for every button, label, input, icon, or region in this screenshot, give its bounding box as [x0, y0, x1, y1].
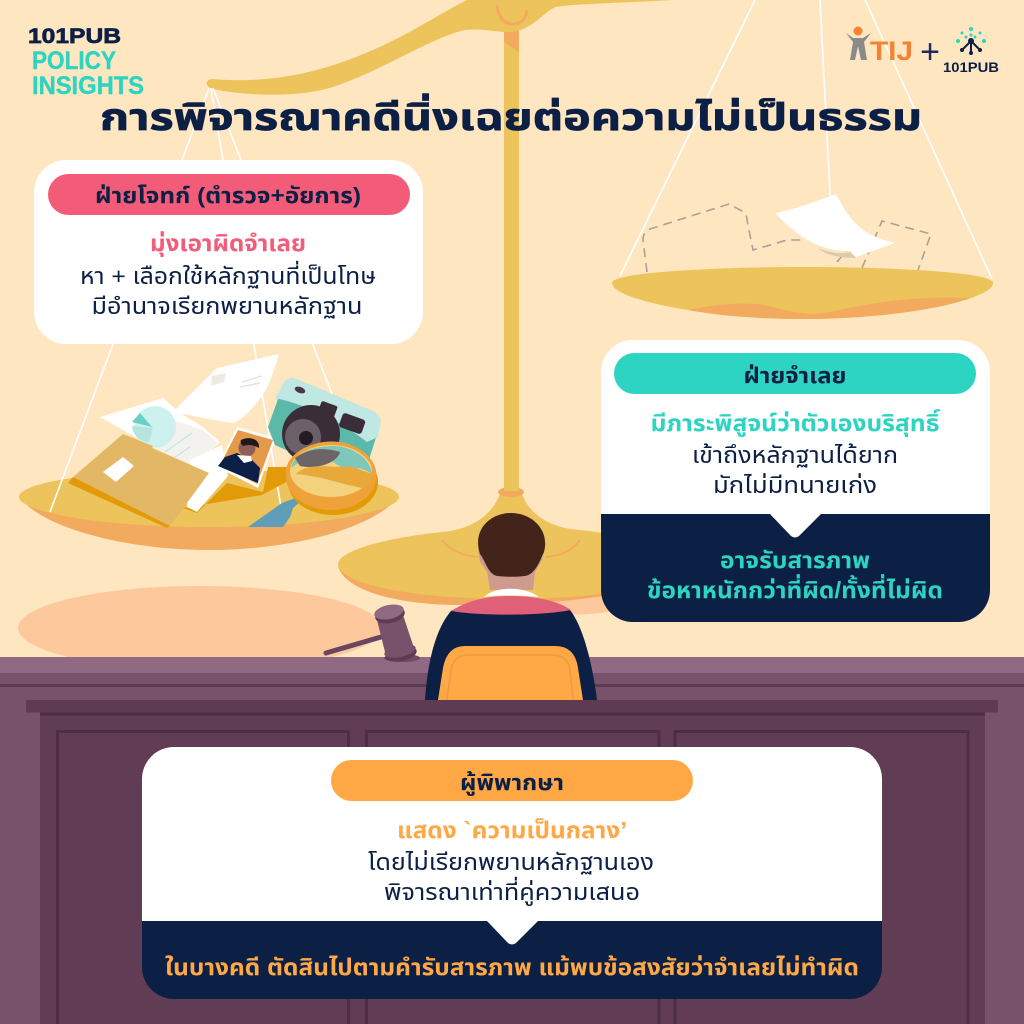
logo: 101PUB Policy Insights: [28, 25, 144, 100]
icon: shadow under photo: [183, 467, 295, 513]
icon: loose paper: [173, 354, 279, 423]
dashed outline of missing evidence: [643, 204, 931, 272]
judge hair: [478, 513, 545, 577]
heading pill: defendant: [614, 353, 976, 394]
text: judge points: พิจารณาเท่าที่คู่ความเสนอ: [384, 876, 640, 907]
scale strings: right pan: [620, 0, 992, 279]
text: defendant outcome: [647, 547, 943, 603]
icon: white sheet under photo: [187, 445, 228, 512]
logo: TIJ + 101PUB: +: [920, 33, 940, 71]
text: prosecution points: หา + เลือกใช้หลักฐานที่เป็นโทษ: [80, 260, 376, 289]
text: defendant points: มีภาระพิสูจน์ว่าตัวเองบริสุทธิ์: [650, 408, 941, 437]
text: defendant points: [650, 408, 941, 498]
judge's bench: [0, 657, 1024, 1024]
text: defendant points: มักไม่มีทนายเก่ง: [713, 472, 877, 498]
right scale pan with missing evidence: [612, 194, 993, 319]
icon: 101PUB network: [956, 27, 986, 55]
text: defendant outcome: อาจรับสารภาพ: [720, 547, 870, 573]
judge collar: [484, 589, 539, 597]
judge neck and ears: [478, 550, 544, 590]
text: judge points: [368, 817, 654, 907]
heading pill: prosecution: ฝ่ายโจทก์ (ตำรวจ+อัยการ): [95, 183, 361, 208]
judge chair: [438, 646, 583, 700]
scale: central stand, beam and base: [207, 0, 682, 615]
judge sash: [451, 596, 571, 615]
icon: magnifying glass: [248, 443, 378, 527]
logo: 101PUB Policy Insights: POLICY: [32, 47, 116, 75]
text: prosecution points: [80, 230, 376, 319]
logo: 101PUB Policy Insights: INSIGHTS: [32, 72, 144, 100]
shadow: left pan floor shadow: [18, 586, 382, 670]
logo: 101PUB Policy Insights: 101PUB: [28, 25, 121, 48]
judge seen from behind: [425, 513, 597, 700]
panel: defendant: [601, 340, 990, 622]
icon: folder: [68, 434, 209, 528]
icon: document with pie chart: [100, 398, 220, 465]
text: judge points: โดยไม่เรียกพยานหลักฐานเอง: [368, 849, 654, 875]
heading pill: judge: [331, 760, 693, 801]
panel: judge: [142, 747, 882, 999]
text: prosecution points: มีอำนาจเรียกพยานหลักฐาน: [92, 293, 362, 319]
panel: prosecution: [34, 160, 423, 344]
text: defendant points: เข้าถึงหลักฐานได้ยาก: [692, 442, 898, 468]
heading pill: defendant: ฝ่ายจำเลย: [744, 363, 846, 388]
text: defendant outcome: ข้อหาหนักกว่าที่ผิด/ทั้งที่ไม่ผิด: [647, 574, 943, 603]
icon: single paper: [775, 194, 895, 258]
title: การพิจารณาคดีนิ่งเฉยต่อความไม่เป็นธรรม: [100, 93, 922, 138]
scale strings: left pan: [50, 88, 332, 525]
heading pill: judge: ผู้พิพากษา: [460, 770, 564, 796]
text: judge outcome: ในบางคดี ตัดสินไปตามคำรับสารภาพ แม้พบข้อสงสัยว่าจำเลยไม่ทำผิด: [165, 954, 859, 980]
gavel: [326, 602, 420, 664]
text: prosecution points: มุ่งเอาผิดจำเลย: [150, 230, 306, 257]
logo: TIJ + 101PUB: 101PUB: [943, 60, 999, 75]
icon: camera: [268, 378, 381, 480]
evidence pile on left pan: [68, 354, 381, 528]
icon: TIJ person: [846, 26, 871, 60]
logo: TIJ + 101PUB: [846, 26, 999, 75]
judge robe: [425, 610, 597, 700]
heading pill: prosecution: [48, 174, 410, 215]
left scale pan: [19, 470, 399, 550]
pan dish: [612, 267, 993, 319]
icon: photo of suspect: [217, 427, 276, 488]
text: judge points: แสดง `ความเป็นกลาง’: [397, 817, 627, 843]
logo: TIJ + 101PUB: TIJ: [870, 36, 913, 66]
